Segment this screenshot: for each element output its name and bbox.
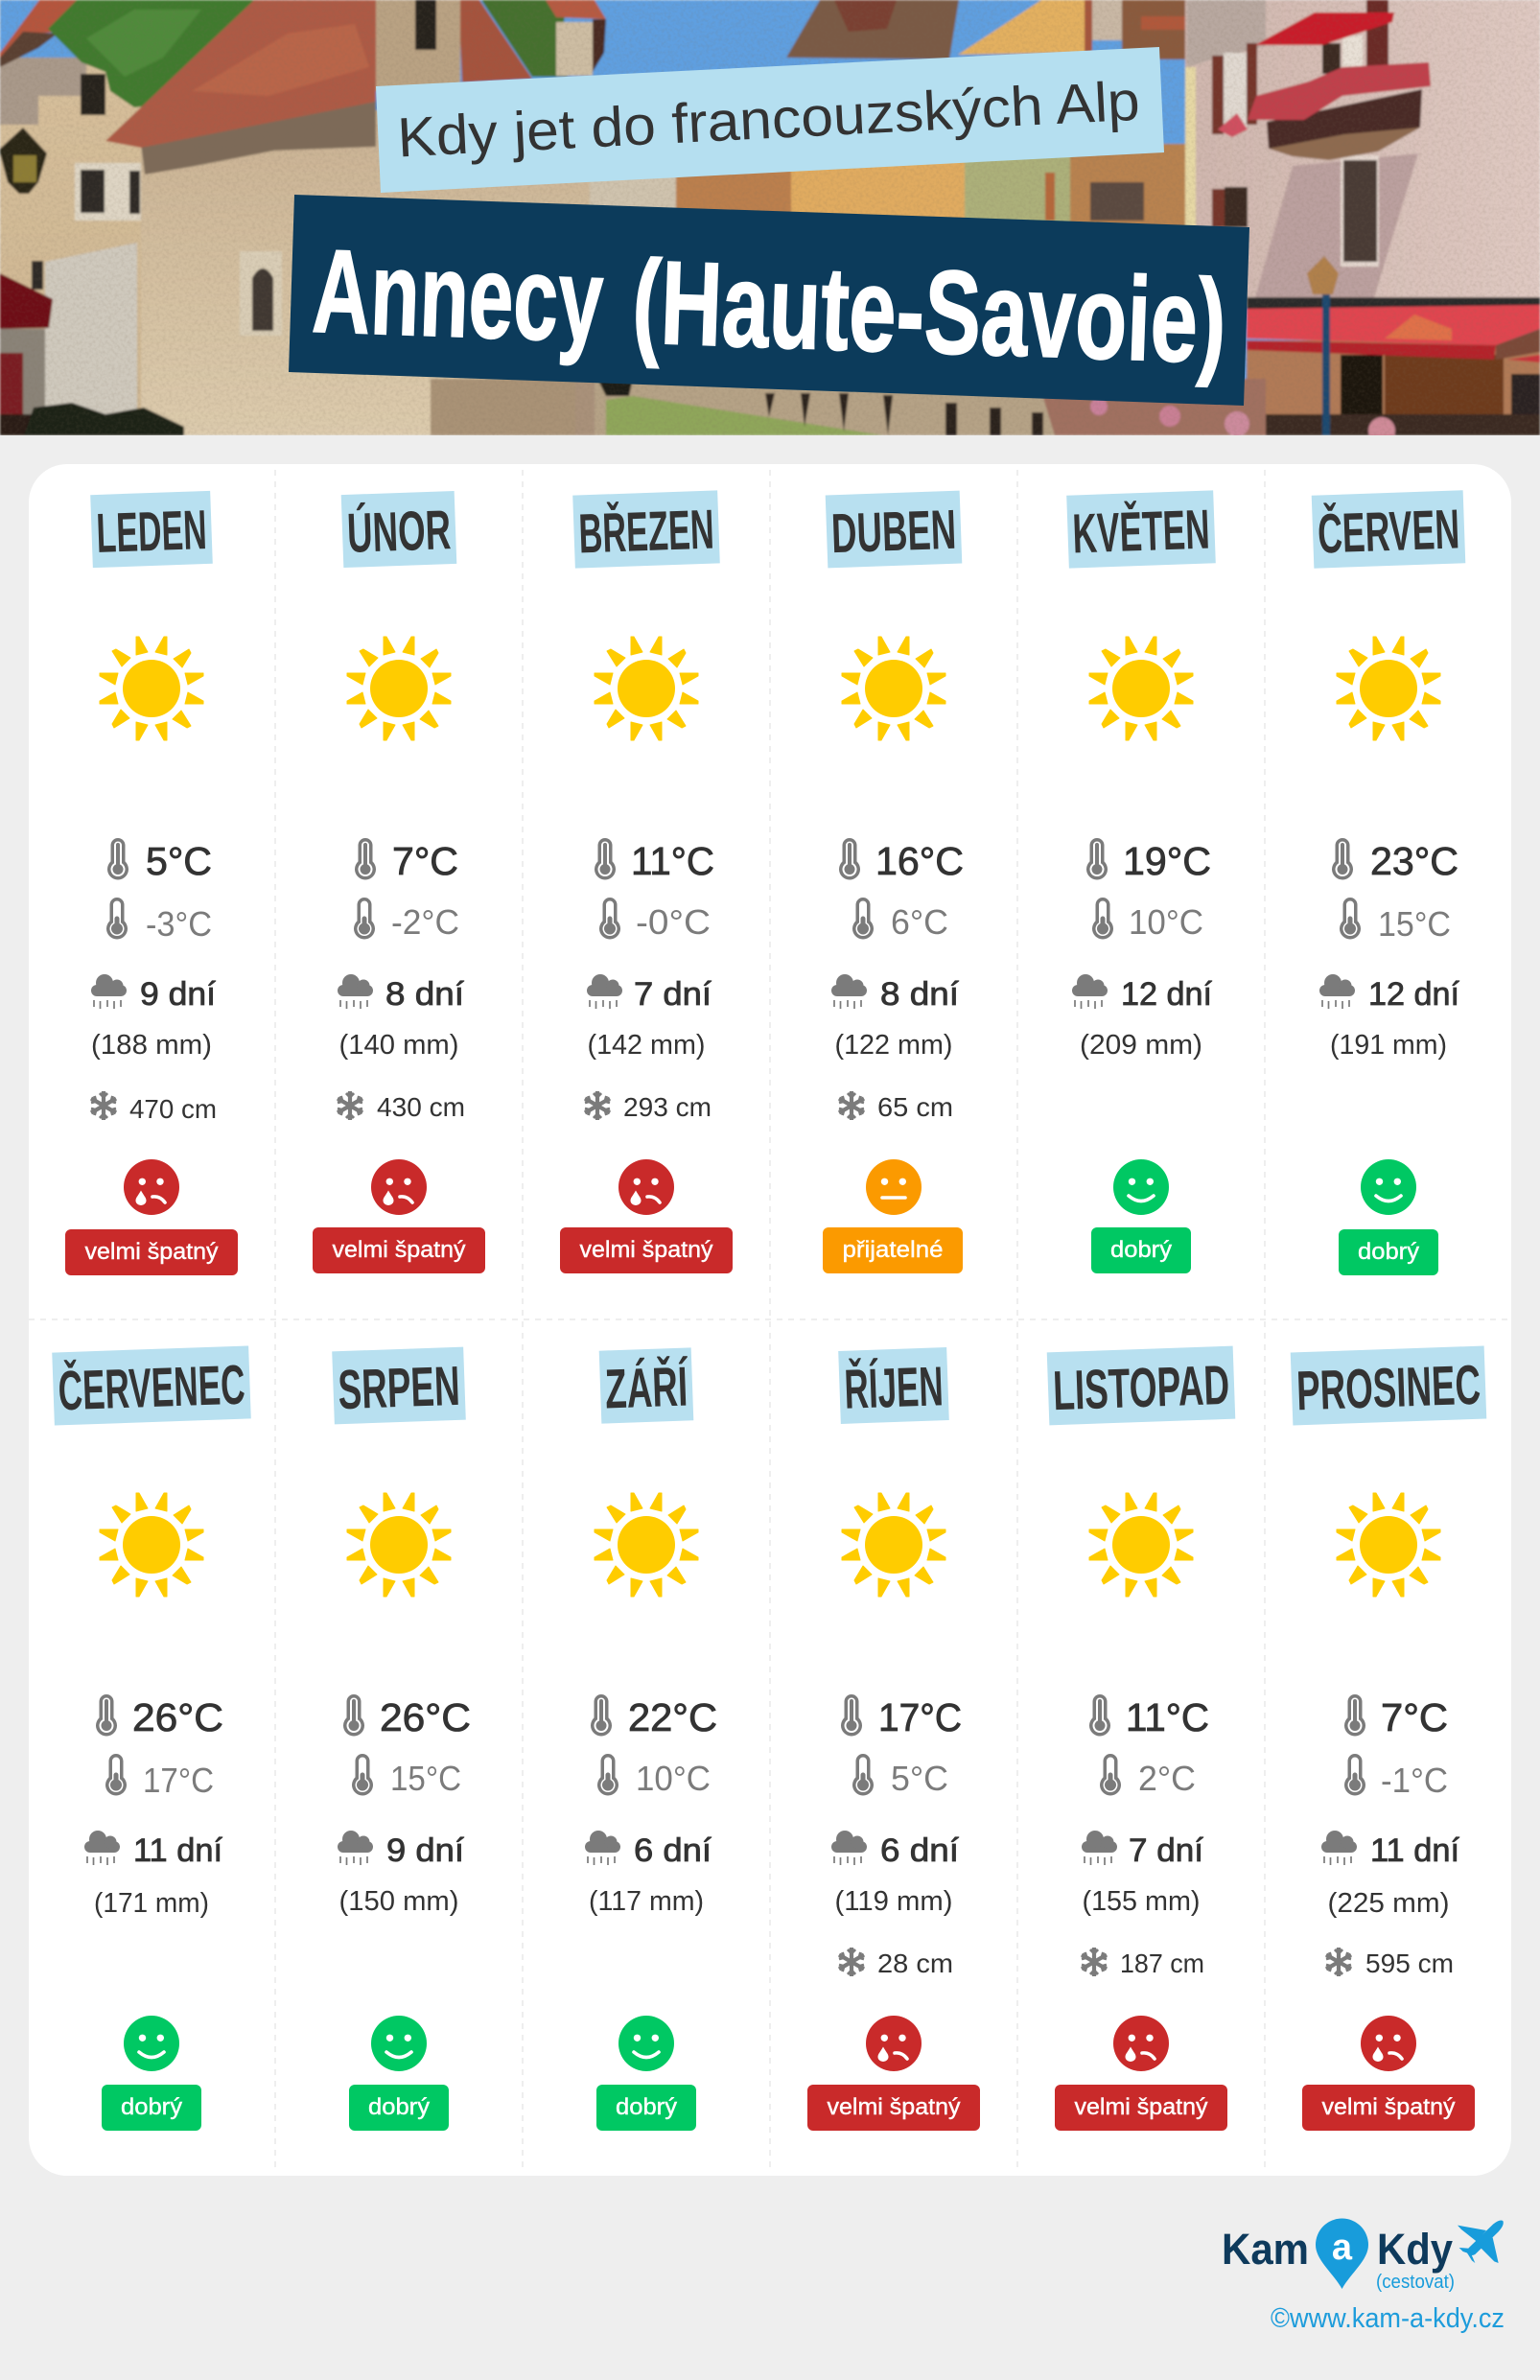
- month heading: [838, 1347, 949, 1424]
- low temperature: [852, 1754, 948, 1798]
- high temperature: [355, 838, 458, 883]
- high temperature: 26°C: [380, 1695, 471, 1739]
- high temperature: [107, 838, 212, 883]
- low temperature: [1340, 898, 1451, 944]
- low temperature: [1092, 898, 1203, 942]
- precipitation: (191 mm): [1330, 1030, 1447, 1061]
- month heading: KVĚTEN: [1071, 499, 1211, 565]
- icon: sun: [1337, 1493, 1440, 1597]
- low temperature: 10°C: [1129, 902, 1203, 942]
- rating pill: [596, 2085, 696, 2131]
- rating pill: přijatelné: [842, 1237, 944, 1263]
- rainy days: 8 dní: [880, 976, 960, 1013]
- rainy days: [91, 974, 217, 1013]
- rating pill: [1091, 1227, 1191, 1273]
- rating pill: dobrý: [121, 2094, 182, 2120]
- high temperature: [1086, 838, 1211, 883]
- icon: map pin: a: [1332, 2228, 1353, 2268]
- rating pill: dobrý: [368, 2094, 430, 2120]
- rainy days: [585, 1831, 712, 1869]
- low temperature: [352, 1754, 461, 1798]
- rainy days: [338, 974, 465, 1013]
- column: cerven: [1312, 490, 1465, 1275]
- snow depth: 293 cm: [623, 1092, 712, 1122]
- rainy days: 12 dní: [1368, 976, 1460, 1013]
- rating pill: [560, 1227, 733, 1273]
- month heading: [599, 1347, 693, 1424]
- rainy days: [1072, 974, 1213, 1013]
- icon: sun: [347, 1493, 451, 1597]
- high temperature: 17°C: [878, 1695, 962, 1739]
- low temperature: [354, 898, 459, 942]
- face rating: [124, 1159, 179, 1215]
- low temperature: -2°C: [391, 902, 459, 942]
- snow depth: [585, 1091, 712, 1122]
- face rating: [1361, 1159, 1416, 1215]
- column: kveten: [1066, 490, 1216, 1273]
- rating pill: velmi špatný: [579, 1237, 713, 1263]
- precipitation: (188 mm): [91, 1030, 212, 1061]
- rainy days: 6 dní: [880, 1832, 960, 1869]
- low temperature: -0°C: [636, 902, 711, 942]
- column: listopad: [1047, 1346, 1235, 2131]
- month heading: LEDEN: [95, 499, 208, 565]
- column: srpen: [332, 1347, 471, 2131]
- column: zari: [585, 1347, 717, 2131]
- rating pill: [313, 1227, 485, 1273]
- face rating: [1113, 1159, 1169, 1215]
- high temperature: 5°C: [146, 839, 212, 883]
- face rating: [618, 2016, 674, 2071]
- high temperature: 16°C: [875, 839, 964, 883]
- low temperature: [852, 898, 948, 942]
- high temperature: [595, 838, 714, 883]
- low temperature: [105, 1754, 214, 1800]
- rating pill: [823, 1227, 963, 1273]
- month heading: BŘEZEN: [577, 499, 715, 565]
- icon: sun: [1089, 637, 1193, 740]
- title banner: [289, 195, 1249, 406]
- snow depth: [839, 1948, 953, 1978]
- column: cervenec: [52, 1345, 251, 2131]
- icon: map pin: [1316, 2219, 1368, 2289]
- high temperature: [343, 1694, 471, 1739]
- icon: sun: [842, 1493, 945, 1597]
- low temperature: 2°C: [1138, 1759, 1196, 1798]
- face rating: [371, 1159, 427, 1215]
- month heading: [572, 490, 720, 569]
- icon: sun: [1337, 637, 1440, 740]
- face rating: [1113, 2016, 1169, 2071]
- face rating: [618, 1159, 674, 1215]
- icon: sun: [100, 637, 203, 740]
- rainy days: 9 dní: [386, 1832, 465, 1869]
- title banner: (Haute-Savoie): [630, 236, 1228, 388]
- precipitation: (122 mm): [834, 1030, 953, 1061]
- low temperature: 15°C: [1378, 904, 1451, 944]
- rainy days: [338, 1831, 465, 1869]
- high temperature: 7°C: [392, 839, 458, 883]
- rainy days: [831, 974, 960, 1013]
- face rating: [1361, 2016, 1416, 2071]
- rating pill: dobrý: [616, 2094, 677, 2120]
- rating pill: [807, 2085, 980, 2131]
- icon: sun: [1089, 1493, 1193, 1597]
- month heading: ŘÍJEN: [843, 1355, 945, 1421]
- rainy days: [587, 974, 712, 1013]
- column: leden: [65, 491, 238, 1275]
- high temperature: [96, 1694, 223, 1739]
- rating pill: dobrý: [1110, 1237, 1172, 1263]
- low temperature: -1°C: [1381, 1761, 1448, 1800]
- rainy days: [84, 1831, 223, 1869]
- snow depth: 430 cm: [377, 1092, 465, 1122]
- rating pill: dobrý: [1358, 1239, 1419, 1265]
- low temperature: 17°C: [143, 1761, 214, 1800]
- month heading: [826, 491, 962, 568]
- month heading: [1066, 490, 1216, 569]
- low temperature: -3°C: [146, 904, 212, 944]
- rating pill: [65, 1229, 238, 1275]
- rating pill: [349, 2085, 449, 2131]
- rainy days: 8 dní: [385, 976, 465, 1013]
- icon: sun: [595, 1493, 698, 1597]
- header photo of Annecy: [0, 0, 1540, 444]
- rainy days: 7 dní: [1129, 1832, 1204, 1869]
- month heading: SRPEN: [337, 1355, 461, 1421]
- low temperature: [599, 898, 711, 942]
- column: rijen: [807, 1347, 980, 2131]
- precipitation: (117 mm): [589, 1886, 704, 1917]
- precipitation: (225 mm): [1327, 1888, 1450, 1919]
- month heading: ZÁŘÍ: [604, 1355, 689, 1420]
- high temperature: 19°C: [1123, 839, 1211, 883]
- month heading: ČERVENEC: [58, 1354, 246, 1422]
- month heading: DUBEN: [830, 499, 957, 565]
- rainy days: [1319, 974, 1460, 1013]
- precipitation: (140 mm): [339, 1030, 458, 1061]
- rating pill: velmi špatný: [1321, 2094, 1456, 2120]
- snow depth: [1326, 1948, 1454, 1978]
- precipitation: (155 mm): [1082, 1886, 1201, 1917]
- column: duben: [823, 491, 964, 1273]
- rating pill: [102, 2085, 201, 2131]
- high temperature: 7°C: [1381, 1695, 1448, 1739]
- low temperature: 15°C: [390, 1759, 461, 1798]
- rainy days: 11 dní: [133, 1832, 223, 1869]
- column: brezen: [560, 490, 733, 1273]
- snow depth: 65 cm: [877, 1092, 953, 1122]
- high temperature: 11°C: [1126, 1695, 1209, 1739]
- logo: Kam a Kdy: Kam: [1222, 2225, 1309, 2274]
- subtitle banner: [376, 47, 1164, 193]
- column: unor: [313, 491, 485, 1273]
- high temperature: 11°C: [631, 839, 714, 883]
- high temperature: [841, 1694, 962, 1739]
- precipitation: (150 mm): [339, 1886, 458, 1917]
- face rating: [866, 2016, 922, 2071]
- snow depth: [839, 1091, 953, 1122]
- rainy days: [1082, 1831, 1204, 1869]
- rating pill: [1302, 2085, 1475, 2131]
- rating pill: velmi špatný: [84, 1239, 219, 1265]
- high temperature: 26°C: [132, 1695, 223, 1739]
- high temperature: [839, 838, 964, 883]
- icon: sun: [842, 637, 945, 740]
- rating pill: [1055, 2085, 1227, 2131]
- face rating: [124, 2016, 179, 2071]
- low temperature: 5°C: [891, 1759, 948, 1798]
- high temperature: 23°C: [1370, 839, 1458, 883]
- high temperature: [591, 1694, 717, 1739]
- snow depth: [338, 1091, 465, 1122]
- rainy days: 11 dní: [1370, 1832, 1460, 1869]
- rainy days: 6 dní: [634, 1832, 712, 1869]
- subtitle banner: Kdy jet do francouzských Alp: [396, 70, 1141, 169]
- snow depth: 28 cm: [877, 1948, 953, 1978]
- rating pill: velmi špatný: [827, 2094, 961, 2120]
- title banner: Annecy: [311, 225, 605, 367]
- low temperature: 10°C: [636, 1759, 711, 1798]
- logo: Kam a Kdy: (cestovat): [1376, 2272, 1455, 2293]
- high temperature: [1332, 838, 1458, 883]
- low temperature: [106, 898, 212, 944]
- snow depth: 187 cm: [1120, 1948, 1204, 1978]
- high temperature: [1344, 1694, 1448, 1739]
- logo: Kam a Kdy: Kdy: [1377, 2225, 1453, 2274]
- rainy days: [831, 1831, 960, 1869]
- rating pill: [1339, 1229, 1438, 1275]
- snow depth: [1082, 1948, 1204, 1978]
- snow depth: [91, 1091, 217, 1124]
- rainy days: 7 dní: [634, 976, 712, 1013]
- icon: sun: [100, 1493, 203, 1597]
- high temperature: [1089, 1694, 1209, 1739]
- precipitation: (119 mm): [834, 1886, 953, 1917]
- face rating: [866, 1159, 922, 1215]
- rainy days: 12 dní: [1121, 976, 1213, 1013]
- rating pill: velmi špatný: [1074, 2094, 1208, 2120]
- snow depth: 595 cm: [1365, 1948, 1454, 1978]
- precipitation: (142 mm): [587, 1030, 706, 1061]
- website link: ©www.kam-a-kdy.cz: [1271, 2303, 1505, 2334]
- low temperature: 6°C: [891, 902, 948, 942]
- month heading: ÚNOR: [346, 499, 452, 565]
- month heading: LISTOPAD: [1052, 1354, 1230, 1422]
- icon: sun: [595, 637, 698, 740]
- month heading: [1312, 490, 1465, 569]
- low temperature: [1100, 1754, 1196, 1798]
- calendar panel: [29, 464, 1511, 2176]
- high temperature: 22°C: [628, 1695, 717, 1739]
- icon: airplane: [1458, 2220, 1504, 2263]
- logo: Kam a Kdy: [1222, 2219, 1504, 2293]
- face rating: [371, 2016, 427, 2071]
- precipitation: (171 mm): [94, 1888, 209, 1919]
- column: prosinec: [1291, 1345, 1486, 2131]
- precipitation: (209 mm): [1080, 1030, 1202, 1061]
- low temperature: [1344, 1754, 1448, 1800]
- month heading: [90, 491, 213, 568]
- month heading: [52, 1345, 251, 1426]
- icon: sun: [347, 637, 451, 740]
- rainy days: [1321, 1831, 1460, 1869]
- low temperature: [597, 1754, 711, 1798]
- rainy days: 9 dní: [140, 976, 217, 1013]
- month heading: [332, 1347, 466, 1424]
- month heading: [341, 491, 456, 568]
- month heading: [1047, 1346, 1235, 1425]
- snow depth: 470 cm: [129, 1094, 217, 1124]
- rating pill: velmi špatný: [332, 1237, 466, 1263]
